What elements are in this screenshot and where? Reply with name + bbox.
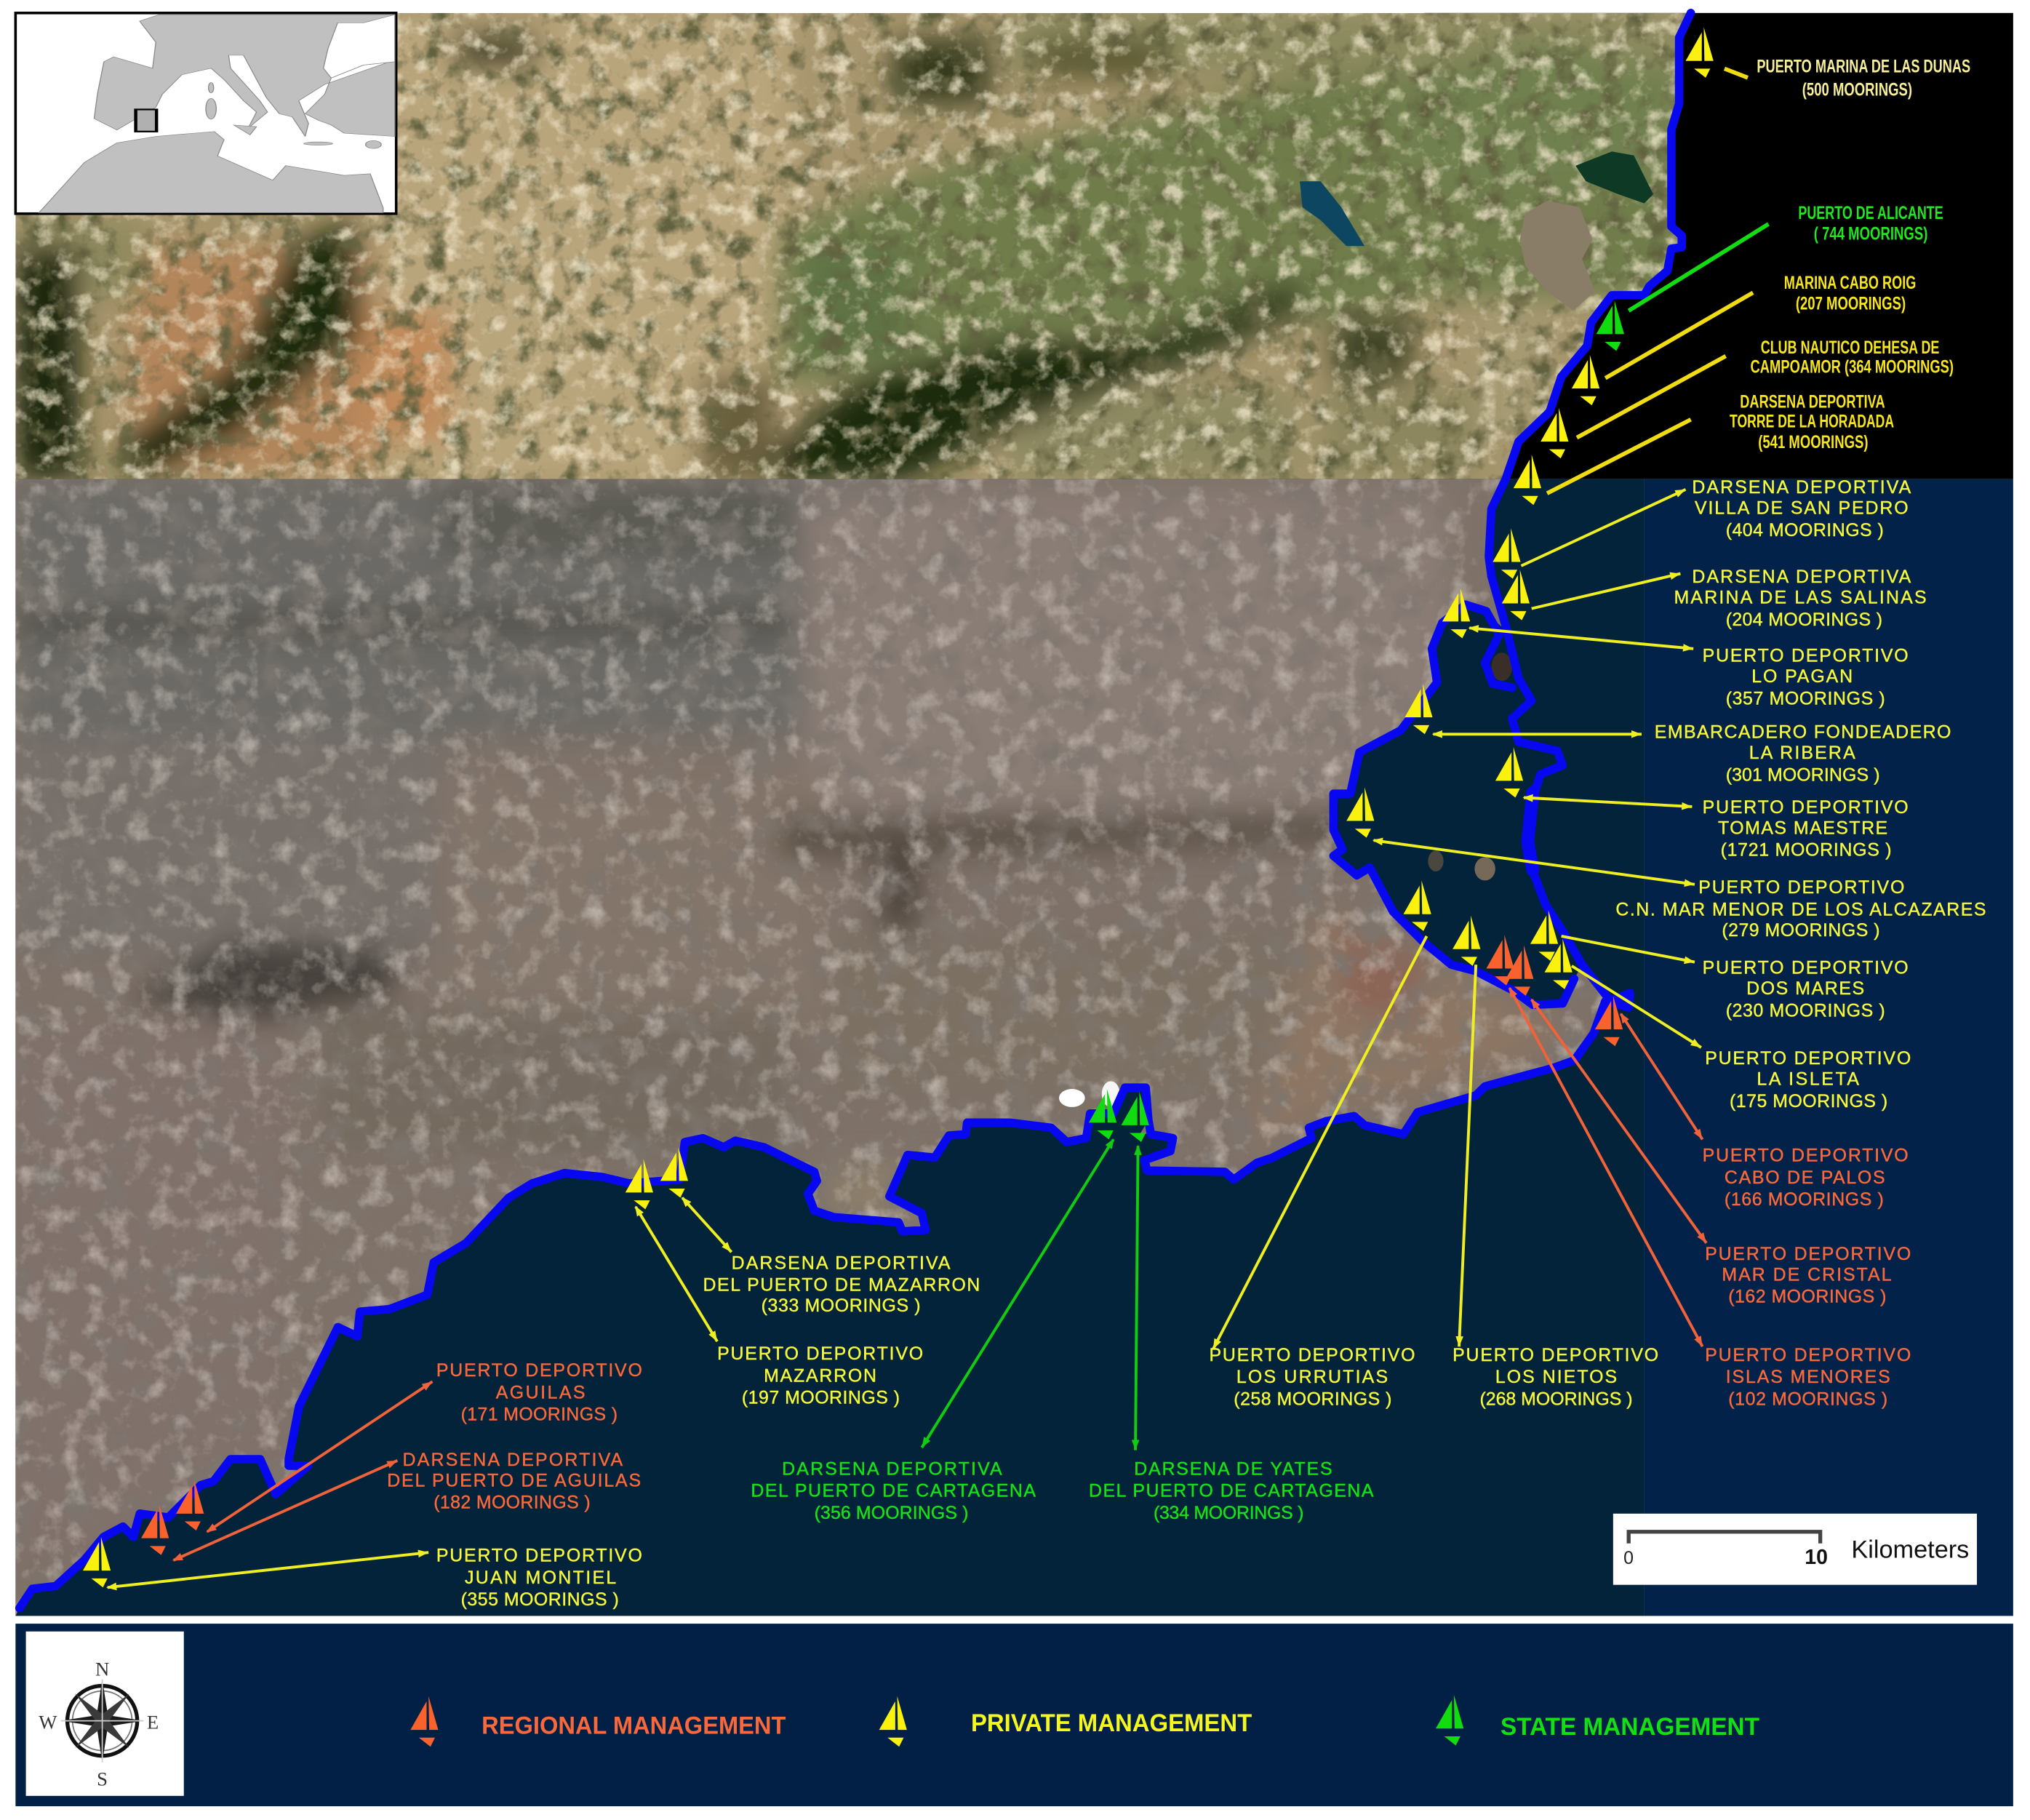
label: Embarcadero Fondeadero La Ribera: (301 MOORINGS ) [1726,765,1880,785]
sea: navy lower section [15,479,2013,1616]
label: Los Nietos: (268 MOORINGS ) [1480,1389,1633,1409]
label: Los Urrutias: LOS URRUTIAS [1236,1367,1388,1387]
label: C.N. Mar Menor de los Alcazares [1615,877,1986,941]
label: Club Nautico Dehesa de Campoamor [1751,338,1954,378]
label: Club Nautico Dehesa de Campoamor: CLUB NAUTICO DEHESA DE [1761,338,1939,358]
label: Darsena Deportiva del Puerto de Mazarron [703,1253,980,1316]
label: Marina de las Salinas [1674,567,1927,630]
label: Puerto Marina de las Dunas: (500 MOORINGS) [1802,80,1912,100]
label: Darsena Deportiva del Puerto de Aguilas: (182 MOORINGS ) [433,1493,591,1513]
label: Darsena Deportiva Torre de la Horadada: (541 MOORINGS) [1758,432,1869,452]
label: La Isleta: LA ISLETA [1757,1069,1859,1090]
label: Darsena Deportiva del Puerto de Cartagena [751,1458,1036,1523]
label: Lo Pagan: (357 MOORINGS ) [1726,688,1885,709]
label: Cabo de Palos: (166 MOORINGS ) [1725,1189,1884,1210]
label: Dos Mares: (230 MOORINGS ) [1726,1000,1885,1021]
label: Tomas Maestre: TOMAS MAESTRE [1718,818,1887,838]
scale bar: 0 [1623,1548,1634,1568]
label: Islas Menores: (102 MOORINGS ) [1728,1389,1887,1409]
label: Puerto de Alicante: ( 744 MOORINGS) [1814,223,1927,244]
scale bar [1613,1514,1977,1585]
label: Juan Montiel: PUERTO DEPORTIVO [436,1546,642,1566]
boats: regional management [141,935,1623,1555]
label: Lo Pagan [1703,646,1909,709]
label: Los Nietos: LOS NIETOS [1495,1367,1617,1387]
label: Tomas Maestre: (1721 MOORINGS ) [1721,840,1892,861]
label: Islas Menores: ISLAS MENORES [1726,1367,1890,1387]
label: Juan Montiel: JUAN MONTIEL [465,1568,616,1588]
label: Tomas Maestre: PUERTO DEPORTIVO [1703,797,1909,818]
label: Mar de Cristal: (162 MOORINGS ) [1728,1287,1886,1307]
compass rose: E [147,1711,159,1733]
label: Darsena de Yates del Puerto de Cartagena: DARSENA DE YATES [1134,1458,1332,1479]
label: La Isleta [1705,1048,1911,1111]
label: Puerto Deportivo Aguilas: AGUILAS [496,1382,586,1402]
label: Mar de Cristal: MAR DE CRISTAL [1722,1264,1892,1285]
legend: private management: PRIVATE MANAGEMENT [971,1709,1252,1737]
lagoon: La Mata [1575,151,1653,203]
label: Puerto Deportivo Mazarron: MAZARRON [764,1365,876,1386]
label: Darsena Deportiva Torre de la Horadada [1730,392,1894,452]
label: Darsena Deportiva del Puerto de Cartagena: (356 MOORINGS ) [815,1503,968,1523]
legend: private management [879,1696,1252,1747]
compass rose [26,1632,184,1796]
label: Embarcadero Fondeadero La Ribera: LA RIBERA [1749,743,1855,763]
compass rose: W [39,1711,57,1733]
label: Lo Pagan: PUERTO DEPORTIVO [1703,646,1909,666]
label: Los Nietos: PUERTO DEPORTIVO [1452,1345,1658,1365]
label: Puerto Deportivo Aguilas: PUERTO DEPORTIVO [436,1360,642,1381]
legend bar [15,1624,2013,1806]
reservoir [1300,181,1364,246]
label: Los Urrutias: PUERTO DEPORTIVO [1209,1345,1415,1365]
label: C.N. Mar Menor de los Alcazares: PUERTO DEPORTIVO [1698,877,1904,898]
white patches near Cartagena [1059,1081,1120,1107]
lagoon: Torrevieja [1520,201,1595,311]
label: Mar de Cristal: PUERTO DEPORTIVO [1705,1244,1911,1264]
label: Puerto de Alicante [1798,203,1943,244]
label: Embarcadero Fondeadero La Ribera [1655,722,1951,785]
leader arrows: lower section yellow [108,490,1701,1587]
boats: private management [83,27,1714,1587]
label: Mar de Cristal [1705,1244,1911,1307]
compass rose: N [95,1658,109,1680]
label: Darsena Deportiva del Puerto de Aguilas [387,1450,641,1513]
label: Marina de las Salinas: DARSENA DEPORTIVA [1692,567,1911,587]
label: Juan Montiel [436,1546,642,1610]
label: Tomas Maestre [1703,797,1909,861]
leader arrows: green [922,1139,1138,1450]
leader lines: upper section [1547,68,1768,493]
label: Marina Cabo Roig [1784,273,1916,314]
label: Darsena de Yates del Puerto de Cartagena: (334 MOORINGS ) [1154,1503,1303,1523]
legend: regional management: REGIONAL MANAGEMENT [481,1712,786,1739]
legend: state management [1436,1695,1759,1745]
label: Darsena Deportiva del Puerto de Mazarron: (333 MOORINGS ) [762,1296,921,1316]
label: Marina Cabo Roig: (207 MOORINGS) [1796,293,1906,314]
label: Marina de las Salinas: (204 MOORINGS ) [1726,610,1882,630]
label: Villa de San Pedro: DARSENA DEPORTIVA [1692,477,1911,498]
scale bar: Kilometers [1851,1536,1969,1563]
legend: regional management [410,1696,786,1747]
label: Islas Menores: PUERTO DEPORTIVO [1705,1345,1911,1365]
label: La Isleta: PUERTO DEPORTIVO [1705,1048,1911,1069]
label: Embarcadero Fondeadero La Ribera: EMBARCADERO FONDEADERO [1655,722,1951,743]
inset locator map [15,13,396,214]
label: Dos Mares: PUERTO DEPORTIVO [1703,958,1909,978]
Mar Menor islands [1428,652,1512,880]
label: Villa de San Pedro: VILLA DE SAN PEDRO [1695,498,1909,519]
label: Villa de San Pedro: (404 MOORINGS ) [1726,520,1884,540]
label: C.N. Mar Menor de los Alcazares: C.N. MAR MENOR DE LOS ALCAZARES [1615,899,1986,919]
label: Darsena Deportiva del Puerto de Aguilas: DARSENA DEPORTIVA [403,1450,623,1470]
label: Cabo de Palos [1703,1146,1909,1210]
label: Cabo de Palos: PUERTO DEPORTIVO [1703,1146,1909,1166]
label: Puerto Deportivo Mazarron: PUERTO DEPORTIVO [717,1344,923,1364]
label: Marina de las Salinas: MARINA DE LAS SALINAS [1674,588,1927,608]
label: Darsena Deportiva del Puerto de Aguilas: DEL PUERTO DE AGUILAS [387,1470,641,1490]
label: Juan Montiel: (355 MOORINGS ) [461,1589,619,1610]
label: Puerto Deportivo Mazarron: (197 MOORINGS ) [742,1388,900,1408]
label: Los Urrutias [1209,1345,1415,1409]
label: Darsena Deportiva Torre de la Horadada: DARSENA DEPORTIVA [1740,392,1885,412]
scale bar: 10 [1805,1546,1828,1569]
label: Islas Menores [1705,1345,1911,1409]
label: Puerto Deportivo Aguilas: (171 MOORINGS ) [461,1405,618,1425]
label: Dos Mares [1703,958,1909,1021]
label: La Isleta: (175 MOORINGS ) [1730,1091,1887,1111]
label: Darsena de Yates del Puerto de Cartagena [1089,1458,1374,1523]
label: C.N. Mar Menor de los Alcazares: (279 MOORINGS ) [1722,920,1880,941]
label: Darsena Deportiva del Puerto de Cartagena: DEL PUERTO DE CARTAGENA [751,1481,1036,1501]
label: Darsena Deportiva Torre de la Horadada: TORRE DE LA HORADADA [1730,411,1894,431]
label: Puerto Deportivo Aguilas [436,1360,642,1425]
satellite land: lower section [15,479,1634,1619]
leader arrows: orange [174,988,1706,1560]
label: Los Nietos [1452,1345,1658,1409]
boats: state management [1089,300,1624,1142]
label: Villa de San Pedro [1692,477,1911,540]
label: Darsena Deportiva del Puerto de Mazarron: DARSENA DEPORTIVA [732,1253,951,1273]
satellite land: upper section [15,13,1698,482]
label: Lo Pagan: LO PAGAN [1751,666,1853,687]
label: Puerto de Alicante: PUERTO DE ALICANTE [1798,203,1943,223]
label: Marina Cabo Roig: MARINA CABO ROIG [1784,273,1916,293]
label: Darsena Deportiva del Puerto de Cartagena: DARSENA DEPORTIVA [782,1458,1002,1479]
legend: state management: STATE MANAGEMENT [1500,1713,1759,1741]
label: Club Nautico Dehesa de Campoamor: CAMPOAMOR (364 MOORINGS) [1751,357,1954,378]
label: Puerto Marina de las Dunas [1757,57,1970,100]
label: Darsena de Yates del Puerto de Cartagena: DEL PUERTO DE CARTAGENA [1089,1481,1374,1501]
label: Dos Mares: DOS MARES [1746,978,1864,999]
label: Los Urrutias: (258 MOORINGS ) [1234,1389,1391,1409]
label: Darsena Deportiva del Puerto de Mazarron: DEL PUERTO DE MAZARRON [703,1275,980,1296]
compass rose: S [97,1768,108,1790]
label: Cabo de Palos: CABO DE PALOS [1725,1168,1885,1188]
coastline: blue line [20,13,1691,1608]
label: Puerto Deportivo Mazarron [717,1344,923,1408]
sea: black upper section [1424,13,2013,479]
